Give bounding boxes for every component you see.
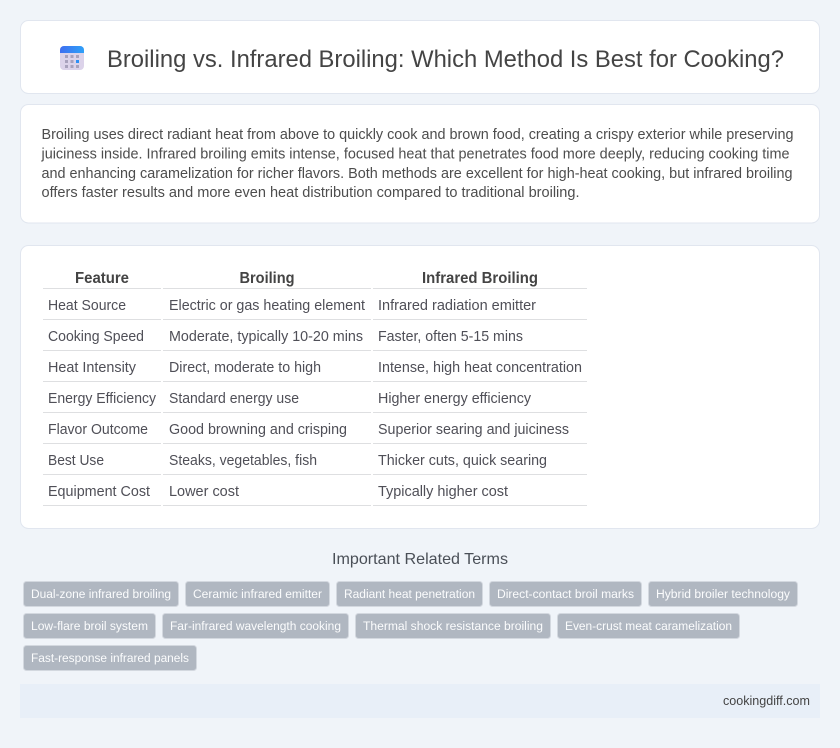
tag: Far-infrared wavelength cooking [170, 619, 341, 633]
tag [648, 582, 798, 606]
table row: heat intensity [48, 360, 582, 376]
table row: best use: Best Use [48, 453, 104, 469]
panel: description [20, 104, 820, 223]
table header: Feature [75, 270, 129, 287]
table row: best use: Thicker cuts, quick searing [378, 453, 547, 469]
tag: Radiant heat penetration [344, 587, 475, 601]
table row: heat intensity: Direct, moderate to high [169, 360, 321, 376]
table row: equipment cost: Typically higher cost [378, 484, 508, 500]
tag: Hybrid broiler technology [656, 587, 791, 601]
tag [24, 582, 178, 606]
tag [356, 614, 550, 638]
tag: Ceramic infrared emitter [193, 587, 322, 601]
table header [75, 270, 538, 287]
table row: cooking speed [48, 329, 523, 345]
footer [20, 684, 820, 718]
table row: energy efficiency: Standard energy use [169, 391, 299, 407]
table header: Broiling [240, 270, 294, 287]
table row: heat intensity: Intense, high heat concentration [378, 360, 582, 376]
related term tags [24, 582, 798, 670]
footer source: cookingdiff.com [723, 693, 810, 708]
table row: energy efficiency: Higher energy efficiency [378, 391, 532, 407]
table row: flavor outcome [48, 422, 569, 438]
tag: Dual-zone infrared broiling [31, 587, 171, 601]
description text: juiciness inside. Infrared broiling emits intense, focused heat that penetrates food more deeply, reducing cooking time [40, 146, 789, 162]
table row: flavor outcome: Good browning and crisping [169, 422, 347, 438]
heading: related terms: Important Related Terms [332, 551, 508, 568]
icon: calendar [60, 46, 84, 70]
description text: Broiling uses direct radiant heat from above to quickly cook and brown food, creating a crispy exterior while preserving [42, 127, 794, 143]
panel: comparison table [20, 246, 820, 528]
table row: equipment cost [48, 484, 508, 500]
table row: equipment cost: Equipment Cost [48, 484, 150, 500]
tag: Direct-contact broil marks [497, 587, 634, 601]
table row: cooking speed: Cooking Speed [48, 329, 144, 345]
table row: best use: Steaks, vegetables, fish [169, 453, 317, 469]
table row: best use [48, 453, 547, 469]
table header: Infrared Broiling [422, 270, 538, 287]
tag [162, 614, 348, 638]
title: Broiling vs. Infrared Broiling: Which Method Is Best for Cooking? [107, 46, 784, 73]
table row: heat source: Infrared radiation emitter [378, 298, 536, 314]
description text [40, 127, 793, 201]
panel: header [20, 20, 820, 94]
description text: and enhancing caramelization for richer flavors. Both methods are excellent for high-heat cooking, but infrared broiling [42, 166, 792, 182]
tag [558, 614, 740, 638]
tag [24, 646, 196, 670]
tag: Thermal shock resistance broiling [363, 619, 543, 633]
tag: Fast-response infrared panels [31, 651, 189, 665]
tag [24, 614, 156, 638]
table row: flavor outcome: Flavor Outcome [48, 422, 148, 438]
table row: cooking speed: Faster, often 5-15 mins [378, 329, 523, 345]
table row: energy efficiency: Energy Efficiency [48, 391, 157, 407]
table row: heat source: Electric or gas heating element [169, 298, 365, 314]
tag: Low-flare broil system [31, 619, 148, 633]
table row: heat source: Heat Source [48, 298, 126, 314]
table row: heat intensity: Heat Intensity [48, 360, 137, 376]
description text: offers faster results and more even heat distribution compared to traditional broiling. [42, 185, 580, 201]
table row: flavor outcome: Superior searing and juiciness [378, 422, 569, 438]
tag [186, 582, 330, 606]
tag [490, 582, 642, 606]
table row: cooking speed: Moderate, typically 10-20 mins [169, 329, 363, 345]
table row: heat source [48, 298, 536, 314]
tag [336, 582, 482, 606]
table row: equipment cost: Lower cost [169, 484, 239, 500]
table row: energy efficiency [48, 391, 532, 407]
tag: Even-crust meat caramelization [565, 619, 732, 633]
